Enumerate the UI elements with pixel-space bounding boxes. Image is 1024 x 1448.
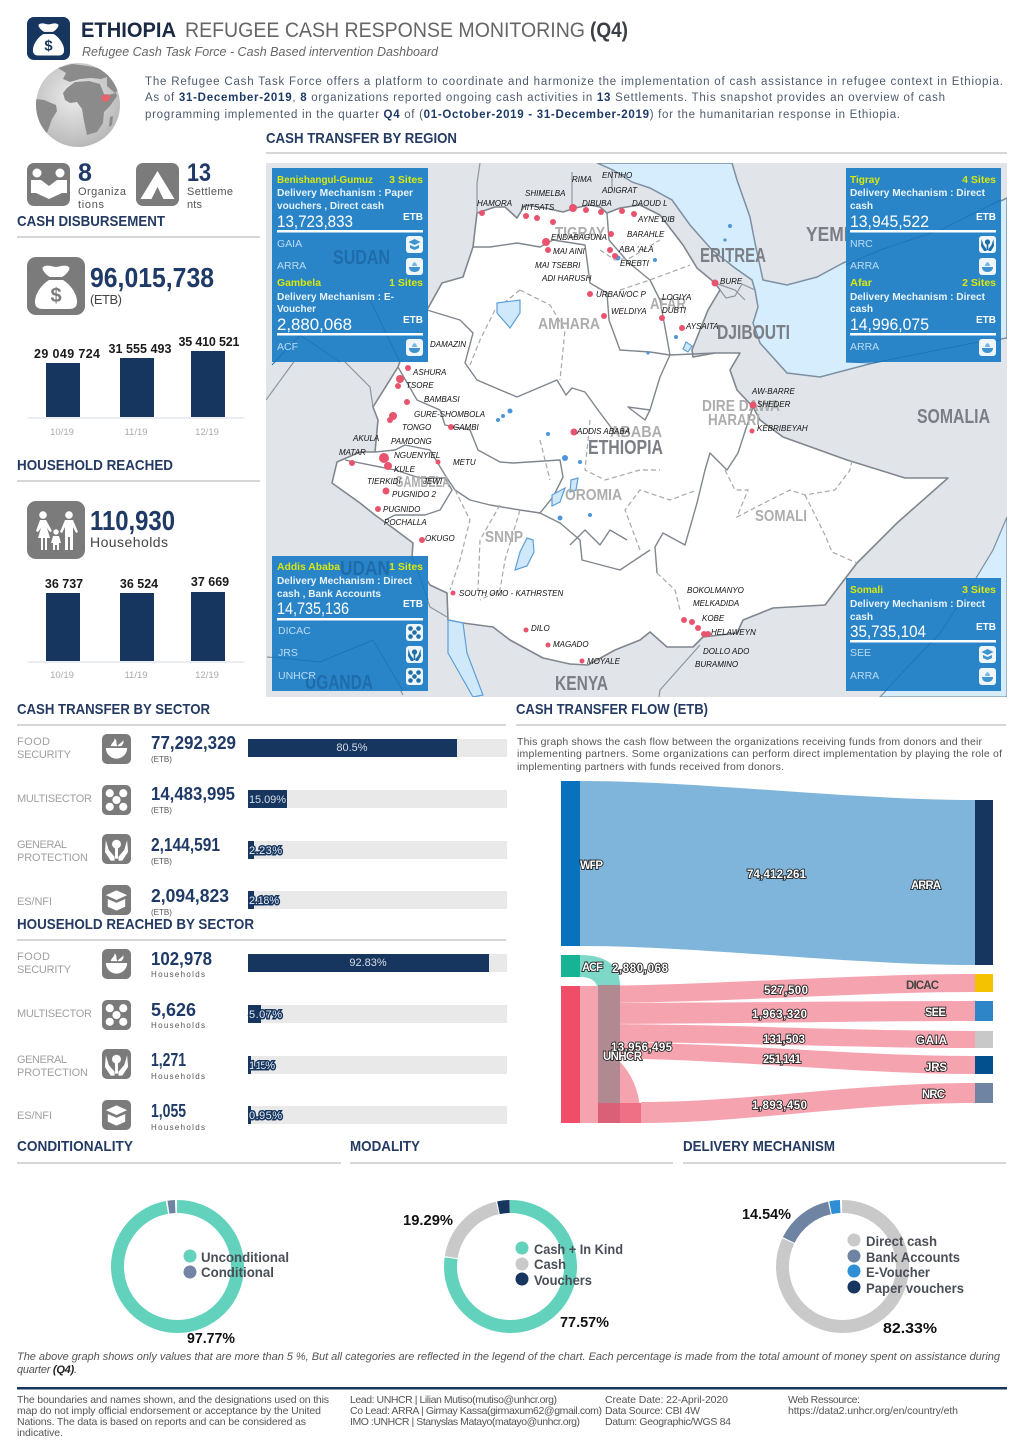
settlement labels: SHIMELBA xyxy=(525,189,565,198)
region labels: AFAR xyxy=(650,296,686,313)
footer: web resource: https://data2.unhcr.org/en/country/eth xyxy=(788,1405,958,1417)
settlement markers xyxy=(349,204,756,664)
settlement labels: ASHURA xyxy=(412,368,446,377)
sector row: ES/NFI amount: (ETB) xyxy=(151,908,172,917)
bar chart: monthly households: 36 524 xyxy=(120,577,158,591)
total disbursed xyxy=(27,257,214,315)
panel: Tigray and Afar: Delivery Mechanism : Direct xyxy=(850,291,985,303)
country labels: SOMALIA xyxy=(917,406,990,428)
panel: Addis Ababa: cash , Bank Accounts xyxy=(277,588,381,600)
sector row: general protection amount xyxy=(17,834,507,866)
bar chart: monthly disbursement: 11/19 xyxy=(124,427,148,438)
KPI: organizations: Organiza xyxy=(78,186,127,198)
donut chart: modality: Vouchers xyxy=(534,1272,592,1288)
country labels xyxy=(555,224,990,695)
settlement labels: GURE-SHOMBOLA xyxy=(414,410,485,419)
Eritrea and Djibouti shared borders xyxy=(715,283,755,300)
settlement labels: HELAWEYN xyxy=(711,628,756,637)
settlement labels: ADIGRAT xyxy=(601,186,638,195)
intro text xyxy=(145,76,1003,121)
panel: Addis Ababa: ETB xyxy=(403,599,423,610)
settlement labels: JEWI xyxy=(422,477,443,486)
settlement labels: BOKOLMANYO xyxy=(687,586,744,595)
footer: disclaimer: The boundaries and names shown, and the designations used on this xyxy=(17,1394,329,1406)
sector row: food security households: Households xyxy=(151,970,205,979)
title: ETHIOPIA xyxy=(81,19,176,42)
panel: Addis Ababa: JRS xyxy=(278,647,298,659)
chart note: The above graph shows only values that are more than 5 %, But all categories are reflected in the legend of the chart. Each percentage is made from the total amount of money spent on assistance during xyxy=(17,1351,1001,1363)
flow description: implementing partners. Some organizations can perform direct implementation by playing the role of xyxy=(517,748,1002,760)
sector row: ES/NFI households: 0.95% xyxy=(249,1110,282,1122)
subtitle: Refugee Cash Task Force - Cash Based intervention Dashboard xyxy=(82,45,439,59)
sector row: ES/NFI households xyxy=(17,1100,507,1132)
sector row: multisector households xyxy=(17,1000,507,1030)
sankey chart: NRC xyxy=(922,1089,945,1101)
region boundaries xyxy=(345,213,753,573)
Indian Ocean xyxy=(880,517,1007,697)
settlement labels: TONGO xyxy=(402,423,431,432)
donut chart: conditionality: Unconditional xyxy=(201,1249,289,1265)
settlement labels: BARAHLE xyxy=(627,230,665,239)
sector row: multisector amount xyxy=(17,784,507,815)
settlement labels: SHEDER xyxy=(757,400,791,409)
panel: Benishangul-Gumuz and Gambela xyxy=(272,168,428,365)
settlement labels: MATAR xyxy=(339,448,366,457)
region labels: DIRE DAWA xyxy=(702,398,780,415)
donut chart: delivery mechanism: E-Voucher xyxy=(866,1264,931,1280)
panel: Tigray and Afar: 4 Sites xyxy=(962,174,996,186)
sankey chart: ARRA xyxy=(911,880,941,892)
panel: Addis Ababa: 14,735,136 xyxy=(277,599,349,618)
flow description: This graph shows the cash flow between the organizations receiving funds from donors and their xyxy=(517,736,982,748)
region labels: ABABA xyxy=(610,424,662,441)
panel: Benishangul-Gumuz and Gambela: Delivery Mechanism : Paper xyxy=(277,187,413,199)
sector row: food security amount: (ETB) xyxy=(151,755,172,764)
panel: Addis Ababa: 1 Sites xyxy=(389,561,423,573)
sector row: ES/NFI amount: 2,094,823 xyxy=(151,886,229,906)
settlement labels: ENDABAGUNA xyxy=(551,233,607,242)
panel: Benishangul-Gumuz and Gambela: SUDAN xyxy=(333,247,390,269)
bar chart: monthly disbursement: 12/19 xyxy=(195,427,219,438)
intro text: The Refugee Cash Task Force offers a platform to coordinate and harmonize the implementation of cash assistance in refugee context in Ethiopia. xyxy=(145,76,1003,88)
title: REFUGEE CASH RESPONSE MONITORING xyxy=(185,19,585,42)
donut chart: delivery mechanism: 14.54% xyxy=(742,1206,791,1223)
sector row: ES/NFI amount: 2.18% xyxy=(249,895,279,907)
settlement labels: LOGIYA xyxy=(662,293,691,302)
heading: conditionality: CONDITIONALITY xyxy=(17,1138,133,1155)
settlement labels: POCHALLA xyxy=(384,518,427,527)
settlement labels: DUBTI xyxy=(662,306,687,315)
footer rule xyxy=(17,1387,1007,1390)
sector row: food security amount: 80.5% xyxy=(336,742,368,754)
heading: cash transfer flow: CASH TRANSFER FLOW (ETB) xyxy=(516,701,708,718)
footer: data source: Datum: Geographic/WGS 84 xyxy=(605,1416,731,1428)
bar chart: monthly disbursement: 10/19 xyxy=(50,427,74,438)
panel: Benishangul-Gumuz and Gambela: 13,723,833 xyxy=(277,212,353,231)
heading: cash disbursement: CASH DISBURSEMENT xyxy=(17,213,165,230)
lakes xyxy=(448,300,692,697)
flow: WFP to ARRA xyxy=(580,781,975,965)
settlement labels: HITSATS xyxy=(521,203,555,212)
bar chart: monthly disbursement: 35 410 521 xyxy=(178,335,240,349)
sector row: general protection amount: 2,144,591 xyxy=(151,835,220,855)
settlement labels: MAGADO xyxy=(553,640,589,649)
sankey chart: SEE xyxy=(925,1007,946,1019)
sector row: multisector amount: (ETB) xyxy=(151,806,172,815)
panel: Somali: cash xyxy=(850,611,873,623)
panel: Somali: Delivery Mechanism : Direct xyxy=(850,598,985,610)
settlement labels: AYSAITA xyxy=(685,322,719,331)
settlement labels: BURE xyxy=(720,277,743,286)
sector row: food security amount: 77,292,329 xyxy=(151,733,236,753)
settlement labels: HAMORA xyxy=(477,199,512,208)
panel: Tigray and Afar: cash xyxy=(850,200,873,212)
sankey chart: 527,500 xyxy=(764,985,808,997)
footer: contacts: IMO :UNHCR | Stanyslas Matayo(matayo@unhcr.org) xyxy=(350,1416,580,1428)
region labels: GAMBELA xyxy=(395,474,450,491)
settlement labels: MOYALE xyxy=(587,657,621,666)
chart note: quarter (Q4). xyxy=(17,1364,77,1376)
settlement labels: URBAN/OC P xyxy=(596,290,646,299)
settlement labels: GAMBI xyxy=(453,423,480,432)
KPI: organizations: 8 xyxy=(78,159,92,187)
sankey chart: JRS xyxy=(925,1062,947,1074)
donut chart: modality: Cash + In Kind xyxy=(534,1241,623,1257)
sankey chart: 251,141 xyxy=(763,1054,802,1066)
panel: Tigray and Afar: Tigray xyxy=(850,174,880,186)
country labels: KENYA xyxy=(555,673,608,695)
region labels: SNNP xyxy=(485,529,523,546)
donut chart: delivery mechanism xyxy=(742,1206,964,1337)
icon: globe xyxy=(35,63,122,147)
panel: Addis Ababa: Addis Ababa xyxy=(277,561,340,573)
neighbouring borders xyxy=(266,163,700,697)
sector row: general protection households: Households xyxy=(151,1072,205,1081)
sankey chart: ACF xyxy=(582,962,603,974)
panel: Tigray and Afar: cash xyxy=(850,303,873,315)
donut chart: delivery mechanism: Paper vouchers xyxy=(866,1280,964,1296)
settlement labels: ABA 'ALA xyxy=(618,245,654,254)
settlement labels: PUGNIDO 2 xyxy=(392,490,437,499)
sector row: ES/NFI households: 1,055 xyxy=(151,1101,186,1121)
flow labels: WFP xyxy=(580,860,603,872)
total disbursed: 96,015,738 xyxy=(90,262,214,293)
footer: contacts xyxy=(350,1394,602,1428)
panel: Benishangul-Gumuz and Gambela: Voucher xyxy=(277,303,316,315)
sector row: general protection households: GENERAL xyxy=(17,1054,67,1066)
intro text: As of 31-December-2019, 8 organizations reported ongoing cash activities in 13 Settlements. This snapshot provides an overview of cash xyxy=(145,92,945,104)
sector row: multisector households: MULTISECTOR xyxy=(17,1008,92,1020)
panel: Tigray and Afar: 14,996,075 xyxy=(850,315,929,334)
total households: 110,930 xyxy=(90,505,175,536)
region labels: OROMIA xyxy=(565,487,622,504)
settlement labels: ADDIS ABABA xyxy=(576,427,630,436)
settlement labels: TIERKIDI xyxy=(367,477,402,486)
donut chart: modality: Cash xyxy=(534,1256,566,1272)
panel: Benishangul-Gumuz and Gambela: Delivery Mechanism : E- xyxy=(277,291,394,303)
panel: Somali: 3 Sites xyxy=(962,584,996,596)
sector row: multisector amount: 14,483,995 xyxy=(151,784,235,804)
KPI: organizations xyxy=(27,159,127,211)
settlement labels: BAMBASI xyxy=(424,395,460,404)
region labels: TIGRAY xyxy=(555,225,605,242)
KPI: settlements: Settleme xyxy=(187,186,233,198)
sector row: multisector households: 5,626 xyxy=(151,1000,196,1020)
country labels: ERITREA xyxy=(700,245,766,267)
heading: cash transfer by region: CASH TRANSFER BY REGION xyxy=(266,130,457,147)
panel: Somali: 35,735,104 xyxy=(850,622,926,641)
settlement labels: MELKADIDA xyxy=(693,599,739,608)
panel: Benishangul-Gumuz and Gambela: ARRA xyxy=(277,260,306,272)
total households: Households xyxy=(90,534,168,550)
chart note xyxy=(17,1351,1001,1376)
footer: disclaimer xyxy=(17,1394,329,1439)
settlement labels: RIMA xyxy=(572,175,592,184)
settlement labels: SOUTH OMO - KATHRSTEN xyxy=(459,589,564,598)
flow description xyxy=(517,736,1002,773)
KPI: settlements: nts xyxy=(187,199,202,211)
bar chart: monthly households xyxy=(27,575,245,681)
total disbursed: (ETB) xyxy=(90,292,122,307)
map: Ethiopia and neighbours xyxy=(266,163,1007,697)
total households xyxy=(27,501,175,559)
region labels: AMHARA xyxy=(538,316,600,333)
panel: Tigray and Afar xyxy=(846,168,1001,363)
settlement labels: ENTIHO xyxy=(602,171,632,180)
settlement labels: WELDIYA xyxy=(611,307,647,316)
donut chart: delivery mechanism: Bank Accounts xyxy=(866,1249,960,1265)
panel: Tigray and Afar: Afar xyxy=(850,277,872,289)
bar chart: monthly disbursement: 29 049 724 xyxy=(34,347,100,361)
settlement labels: AW-BARRE xyxy=(751,387,795,396)
KPI: settlements xyxy=(136,159,233,211)
sector row: ES/NFI amount xyxy=(17,885,507,917)
header icon: money bag xyxy=(27,17,70,60)
sector row: multisector amount: 15.09% xyxy=(249,794,286,806)
sector row: food security households: FOOD xyxy=(17,951,50,963)
donut chart: modality xyxy=(403,1206,623,1331)
footer: disclaimer: indicative. xyxy=(17,1427,63,1439)
bar chart: monthly households: 37 669 xyxy=(191,575,229,589)
settlement labels: KULE xyxy=(394,465,416,474)
donut chart: modality: 19.29% xyxy=(403,1212,453,1229)
settlement labels: DAOUD L xyxy=(632,199,668,208)
settlement labels: PAMDONG xyxy=(391,437,432,446)
KPI: settlements: 13 xyxy=(187,159,211,187)
sankey chart: 1,963,320 xyxy=(752,1009,807,1021)
panel: Benishangul-Gumuz and Gambela: ACF xyxy=(277,341,298,353)
country labels: ETHIOPIA xyxy=(588,437,663,459)
footer: disclaimer: map do not imply official endorsement or acceptance by the United xyxy=(17,1405,321,1417)
panel: Benishangul-Gumuz and Gambela: Gambela xyxy=(277,277,321,289)
panel: Benishangul-Gumuz and Gambela: GAIA xyxy=(277,238,302,250)
panel: Somali xyxy=(846,578,1001,691)
region labels xyxy=(395,225,807,546)
sector row: food security amount xyxy=(17,733,507,764)
bar chart: monthly disbursement: 31 555 493 xyxy=(108,342,172,356)
panel: Benishangul-Gumuz and Gambela: vouchers , Direct cash xyxy=(277,200,384,212)
sankey chart: 2,880,068 xyxy=(612,963,669,975)
donut chart: delivery mechanism: 82.33% xyxy=(883,1320,937,1337)
panel: Benishangul-Gumuz and Gambela: Benishangul-Gumuz xyxy=(277,174,373,186)
nodes xyxy=(561,781,580,946)
panel: Benishangul-Gumuz and Gambela: 2,880,068 xyxy=(277,315,352,334)
sector row: multisector households: 5.07% xyxy=(249,1009,282,1021)
panel: Tigray and Afar: ARRA xyxy=(850,260,879,272)
sector row: food security households xyxy=(17,949,507,979)
sector row: multisector households: Households xyxy=(151,1021,205,1030)
panel: Tigray and Afar: ETB xyxy=(976,315,996,326)
settlement labels: NGUENYIEL xyxy=(394,451,440,460)
footer: data source: Data Source: CBI 4W xyxy=(605,1405,700,1417)
sector row: food security households: 102,978 xyxy=(151,949,212,969)
panel: Tigray and Afar: ETB xyxy=(976,212,996,223)
panel: Benishangul-Gumuz and Gambela: 1 Sites xyxy=(389,277,423,289)
panel: Addis Ababa: UGANDA xyxy=(305,672,373,694)
settlement labels: PUGNIDO xyxy=(383,505,420,514)
sector row: food security amount: FOOD xyxy=(17,736,50,748)
sankey chart: 1,893,450 xyxy=(752,1100,807,1112)
settlement labels: AYNE DIB xyxy=(637,215,675,224)
heading: delivery mechanism: DELIVERY MECHANISM xyxy=(683,1138,835,1155)
region labels: HARARI xyxy=(708,412,760,429)
settlement labels: OKUGO xyxy=(425,534,455,543)
country labels: DJIBOUTI xyxy=(717,322,790,344)
settlement labels: KEBRIBEYAH xyxy=(757,424,808,433)
settlement labels: ADI HARUSH xyxy=(541,274,592,283)
settlement labels: DOLLO ADO xyxy=(703,647,749,656)
sankey chart: UNHCR xyxy=(603,1051,643,1063)
bar chart: monthly households: 11/19 xyxy=(124,670,148,681)
title: (Q4) xyxy=(590,19,628,42)
panel: Tigray and Afar: ARRA xyxy=(850,341,879,353)
panel: Somali: Somali xyxy=(850,584,883,596)
sector row: food security amount: SECURITY xyxy=(17,749,72,761)
sankey chart: GAIA xyxy=(916,1035,947,1047)
bar chart: monthly households: 36 737 xyxy=(45,577,83,591)
donut chart: conditionality: 97.77% xyxy=(187,1330,235,1347)
sector row: general protection amount: GENERAL xyxy=(17,839,67,851)
sector row: general protection amount: PROTECTION xyxy=(17,852,88,864)
donut chart: delivery mechanism: Direct cash xyxy=(866,1233,937,1249)
footer: disclaimer: Nations. The data is based on reports and can be considered as xyxy=(17,1416,306,1428)
sankey chart: DICAC xyxy=(906,980,939,992)
footer: data source xyxy=(605,1394,731,1428)
panel: Addis Ababa xyxy=(272,556,428,694)
sector row: general protection households: PROTECTION xyxy=(17,1067,88,1079)
bar chart: monthly households: 12/19 xyxy=(195,670,219,681)
KPI: organizations: tions xyxy=(78,199,104,211)
sankey chart xyxy=(561,781,993,1123)
settlement labels xyxy=(339,171,808,669)
sector row: general protection amount: 2.23% xyxy=(249,845,282,857)
settlement labels: TSORE xyxy=(406,381,434,390)
country labels: YEMEN xyxy=(806,224,868,246)
heading: household reached: HOUSEHOLD REACHED xyxy=(17,457,173,474)
bar chart: monthly households: 10/19 xyxy=(50,670,74,681)
heading: modality: MODALITY xyxy=(350,1138,420,1155)
sector row: ES/NFI amount: ES/NFI xyxy=(17,896,52,908)
settlement labels: AKULA xyxy=(352,434,379,443)
sector row: general protection amount: (ETB) xyxy=(151,857,172,866)
footer: data source: Create Date: 22-April-2020 xyxy=(605,1394,728,1406)
sector row: ES/NFI households: Households xyxy=(151,1123,205,1132)
intro text: programming implemented in the quarter Q4 of (01-October-2019 - 31-December-2019) for the humanitarian response in Ethiopia. xyxy=(145,109,900,121)
settlement labels: MAI TSEBRI xyxy=(535,261,581,270)
panel: Tigray and Afar: 2 Sites xyxy=(962,277,996,289)
settlement labels: DILO xyxy=(531,624,550,633)
donut chart: modality: 77.57% xyxy=(560,1314,609,1331)
Ethiopia outline xyxy=(332,205,948,665)
panel: Benishangul-Gumuz and Gambela: ETB xyxy=(403,315,423,326)
heading: household reached by sector: HOUSEHOLD REACHED BY SECTOR xyxy=(17,916,254,933)
footer: contacts: Lead: UNHCR | Lilian Mutiso(mutiso@unhcr.org) xyxy=(350,1394,557,1406)
footer: contacts: Co Lead: ARRA | Girmay Kassa(girmaxum62@gmail.com) xyxy=(350,1405,602,1417)
panel: Tigray and Afar: NRC xyxy=(850,238,873,250)
settlement labels: METU xyxy=(453,458,476,467)
settlement labels: DIBUBA xyxy=(582,199,612,208)
sector row: general protection households: 1,271 xyxy=(151,1050,186,1070)
sankey chart: 131,503 xyxy=(763,1034,805,1046)
sankey chart: 13,956,495 xyxy=(611,1042,673,1054)
sector row: general protection households xyxy=(17,1049,507,1081)
flow description: implementing partners with funds received from donors. xyxy=(517,761,784,773)
donut chart: conditionality: Conditional xyxy=(201,1264,274,1280)
sankey chart: 74,412,261 xyxy=(747,869,807,881)
bar chart: monthly disbursement xyxy=(27,335,245,438)
region labels: SOMALI xyxy=(755,508,807,525)
sector row: general protection households: 1.15% xyxy=(249,1060,275,1072)
panel: Somali: ARRA xyxy=(850,670,879,682)
panel: Addis Ababa: UDAN xyxy=(340,558,390,580)
sector row: food security households: 92.83% xyxy=(349,957,387,969)
footer: web resource xyxy=(788,1394,958,1417)
panel: Addis Ababa: DICAC xyxy=(278,625,311,637)
heading: cash transfer by sector: CASH TRANSFER BY SECTOR xyxy=(17,701,210,718)
Red Sea and Gulf of Aden xyxy=(597,163,1007,377)
panel: Addis Ababa: Delivery Mechanism : Direct xyxy=(277,575,412,587)
flow: ACF to UNHCR xyxy=(580,955,620,1068)
footer: web resource: Web Ressource: xyxy=(788,1394,860,1406)
settlement labels: KOBE xyxy=(702,614,725,623)
panel: Tigray and Afar: 13,945,522 xyxy=(850,212,929,231)
settlement labels: EREBTI xyxy=(620,259,650,268)
settlement labels: MAI AINI xyxy=(553,247,585,256)
panel: Benishangul-Gumuz and Gambela: 3 Sites xyxy=(389,174,423,186)
sector row: multisector amount: MULTISECTOR xyxy=(17,793,92,805)
panel: Somali: ETB xyxy=(976,622,996,633)
sector row: ES/NFI households: ES/NFI xyxy=(17,1110,52,1122)
zone boundaries xyxy=(450,240,857,610)
settlement labels: DAMAZIN xyxy=(430,340,466,349)
panel: Addis Ababa: UNHCR xyxy=(278,670,316,682)
flow: UNHCR to partners xyxy=(580,974,975,1123)
panel: Tigray and Afar: Delivery Mechanism : Direct xyxy=(850,187,985,199)
settlement labels: BURAMINO xyxy=(695,660,738,669)
donut chart: conditionality xyxy=(118,1206,289,1347)
panel: Benishangul-Gumuz and Gambela: ETB xyxy=(403,212,423,223)
sector row: food security households: SECURITY xyxy=(17,964,72,976)
panel: Somali: SEE xyxy=(850,647,871,659)
